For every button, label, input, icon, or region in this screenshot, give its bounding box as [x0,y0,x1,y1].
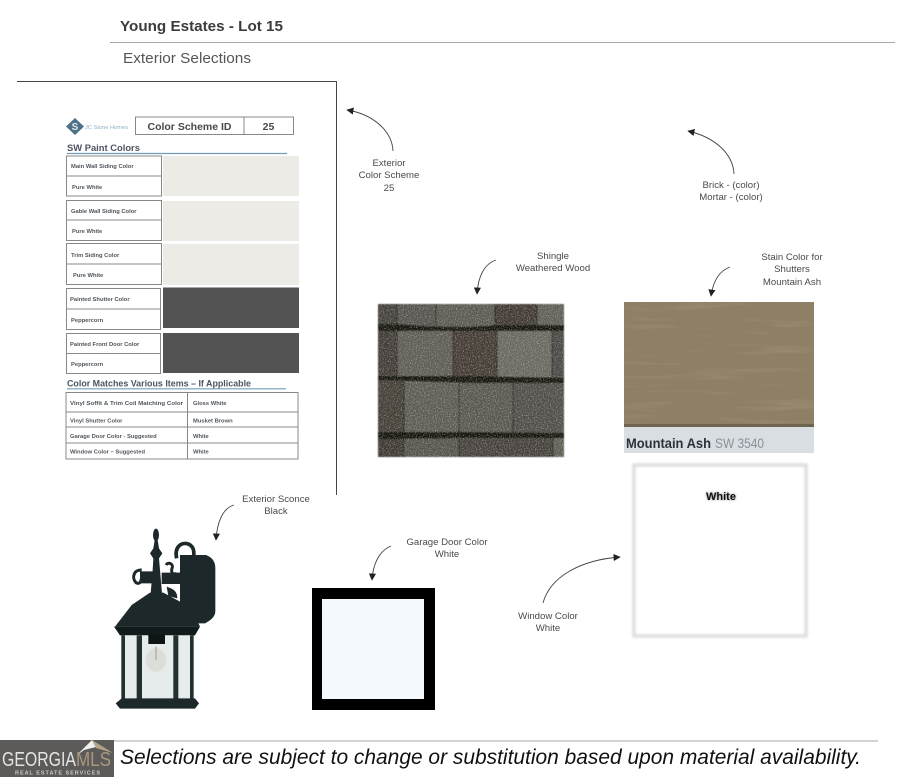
paint row: shutter: Peppercorn [71,318,104,324]
label: exterior color scheme: Exterior [372,158,406,169]
subtitle: Exterior Selections [123,51,251,67]
paint row: main wall [66,156,299,196]
table: color matches: Vinyl Shutter Color [70,418,123,424]
table: color matches: Musket Brown [193,418,233,424]
label: stain color: Mountain Ash [763,277,821,288]
title: Young Estates - Lot 15 [120,19,283,35]
paint row: front door: Painted Front Door Color [70,342,140,348]
color scheme id box: Color Scheme ID [147,121,232,133]
label: exterior color scheme: Color Scheme [359,170,419,181]
document edges [17,82,336,495]
paint row: main wall: Pure White [72,185,103,191]
swatch: shingle photo [378,304,564,457]
logo: builder [66,118,128,135]
paint row: gable wall [66,200,299,241]
arrow: shingle [477,260,496,294]
arrow: garage door [372,546,391,580]
heading: color matches: Color Matches Various Items – If Applicable [67,378,251,388]
label: window colour: White [536,623,560,634]
table: color matches: Garage Door Color - Suggested [70,434,157,440]
color scheme id box: 25 [263,121,274,133]
label: brick and mortar: Brick - (color) [702,180,760,191]
swatch: stain colour sample: Mountain Ash [626,435,711,451]
label: exterior sconce: Exterior Sconce [242,494,310,505]
swatch: stain colour sample: SW 3540 [715,435,764,451]
label: exterior color scheme: 25 [384,183,394,194]
table: color matches: Vinyl Soffit & Trim Coil Matching Color [70,401,184,407]
arrow: window [543,557,620,603]
logo: Georgia MLS: REAL ESTATE SERVICES [15,770,100,776]
panel: color scheme document [17,82,336,495]
paint row: gable wall: Gable Wall Siding Color [71,209,137,215]
paint row: shutter [66,288,299,330]
swatch: garage door white [312,588,435,710]
logo: Georgia MLS: GEORGIA [2,749,77,771]
paint row: shutter: Painted Shutter Color [70,297,130,303]
paint row: main wall: Main Wall Siding Color [71,164,134,170]
arrow: stain [711,267,730,296]
swatch: window white sample [634,465,806,636]
paint row: front door [66,333,299,374]
footer rule [114,740,878,742]
label: stain color: Shutters [774,264,810,275]
paint row: trim [66,244,299,285]
label: stain color: Stain Color for [761,252,823,263]
heading: SW paint colors: SW Paint Colors [67,142,140,153]
label: window colour: Window Color [518,611,579,622]
table: color matches: Gloss White [193,401,227,407]
arrow: brick [688,131,734,174]
logo: Georgia MLS: MLS [76,749,111,771]
swatch: window white sample: White [706,491,736,503]
footer disclaimer: Selections are subject to change or substitution based upon material availability. [120,746,861,769]
paint row: front door: Peppercorn [71,362,104,368]
table: color matches [66,392,298,459]
logo: builder: JC Stone Homes [85,125,128,131]
label: exterior sconce: Black [264,506,288,517]
paint row: trim: Pure White [73,273,104,279]
table: color matches: Window Color – Suggested [70,450,145,456]
logo: Georgia MLS [0,740,114,777]
label: garage door colour: White [435,549,459,560]
logo: builder: S [72,122,79,133]
swatch: stain colour sample [624,302,814,453]
arrow: exterior color scheme [347,110,393,151]
color scheme id box [136,117,294,134]
paint row: gable wall: Pure White [72,229,103,235]
label: brick and mortar: Mortar - (color) [699,192,763,203]
label: shingle: Shingle [537,251,569,262]
swatch: window white sample: White [706,491,736,503]
arrow: sconce [216,505,234,540]
paint row: trim: Trim Siding Color [71,253,120,259]
icon: black wall sconce [114,529,215,709]
table: color matches: White [193,434,210,440]
table: color matches: White [193,450,210,456]
label: shingle: Weathered Wood [516,263,590,274]
label: garage door colour: Garage Door Color [406,537,488,548]
